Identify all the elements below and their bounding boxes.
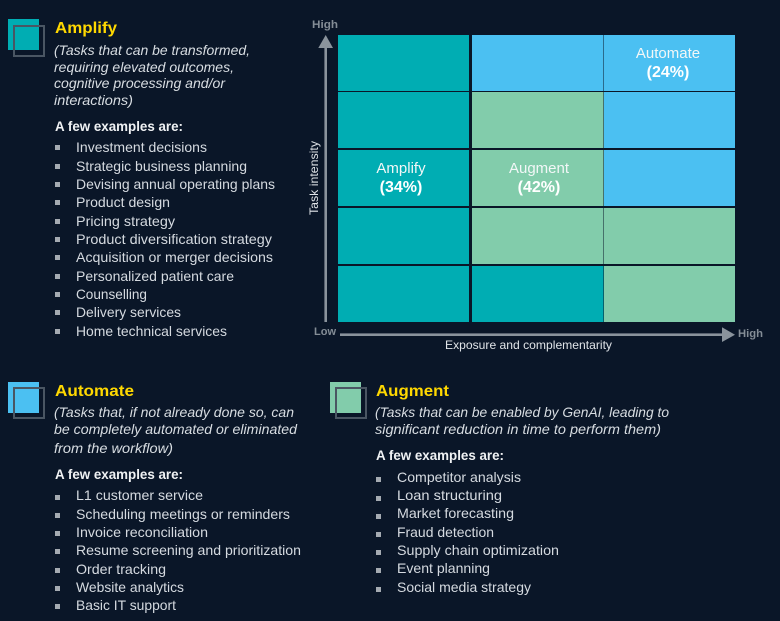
heading: Augment: Augment xyxy=(376,383,450,400)
label: Amplify 34%: Amplify xyxy=(376,160,426,177)
text: Automate definition: be completely automated or eliminated xyxy=(54,421,298,437)
icon: Automate square xyxy=(8,382,44,418)
list: Amplify examples: Devising annual operating plans xyxy=(76,176,275,192)
text: Amplify definition: interactions) xyxy=(54,92,133,108)
panel: Automate description xyxy=(8,382,301,613)
label: Automate 24%: (24%) xyxy=(647,64,689,81)
list: Amplify examples xyxy=(55,139,275,339)
text: Automate definition: (Tasks that, if not already done so, can xyxy=(54,404,294,420)
list: Automate examples: Order tracking xyxy=(76,561,166,577)
subheading: Automate examples: A few examples are: xyxy=(55,466,183,482)
list: Automate examples: Website analytics xyxy=(76,579,184,595)
text: Augment definition: (Tasks that can be enabled by GenAI, leading to xyxy=(375,404,669,420)
text: Automate definition: from the workflow) xyxy=(54,440,173,456)
icon: Augment square xyxy=(330,382,366,418)
list: Amplify examples: Investment decisions xyxy=(76,139,207,155)
list: Augment examples: Event planning xyxy=(397,560,490,576)
list: Automate examples: Scheduling meetings or reminders xyxy=(76,506,290,522)
text: Automate definition xyxy=(54,404,298,456)
subheading: Amplify examples: A few examples are: xyxy=(55,118,183,134)
list: Amplify examples: Product diversification strategy xyxy=(76,231,272,247)
axis label: high intensity: High xyxy=(312,19,338,31)
label: Amplify 34% xyxy=(376,160,426,196)
text: Amplify definition: cognitive processing and/or xyxy=(54,75,226,91)
list: Amplify examples: Home technical services xyxy=(76,323,227,339)
label: Automate 24%: Automate xyxy=(636,45,700,62)
icon: Amplify square xyxy=(8,19,44,56)
panel: Amplify description xyxy=(8,19,275,339)
panel: Augment description xyxy=(330,382,669,595)
text: Augment definition xyxy=(375,404,669,437)
heading: Automate: Automate xyxy=(55,383,134,400)
subheading: Augment examples: A few examples are: xyxy=(376,447,504,463)
list: Automate examples: Resume screening and prioritization xyxy=(76,542,301,558)
list: Augment examples: Fraud detection xyxy=(397,524,494,540)
list: Automate examples: L1 customer service xyxy=(76,487,203,503)
list: Augment examples: Social media strategy xyxy=(397,579,531,595)
list: Amplify examples: Personalized patient care xyxy=(76,268,234,284)
heading: Amplify: Amplify xyxy=(55,20,117,37)
list: Amplify examples: Strategic business planning xyxy=(76,158,247,174)
label: Augment 42%: (42%) xyxy=(518,179,560,196)
axis label: high exposure: High xyxy=(738,328,763,340)
text: Amplify definition: (Tasks that can be transformed, xyxy=(54,42,250,58)
list: Augment examples xyxy=(376,469,559,595)
list: Augment examples: Supply chain optimization xyxy=(397,542,559,558)
grid: matrix cells xyxy=(338,35,735,322)
text: Augment definition: significant reduction in time to perform them) xyxy=(375,421,661,437)
list: Amplify examples: Product design xyxy=(76,194,170,210)
axis label: low: Low xyxy=(314,326,336,338)
list: Automate examples: Invoice reconciliation xyxy=(76,524,208,540)
label: Augment 42% xyxy=(509,160,570,196)
arrow: vertical axis xyxy=(318,35,333,322)
label: Amplify 34%: (34%) xyxy=(380,179,422,196)
axis title: exposure and complementarity: Exposure and complementarity xyxy=(445,338,612,352)
text: Amplify definition: requiring elevated outcomes, xyxy=(54,59,234,75)
label: Automate 24% xyxy=(636,45,700,81)
label: Augment 42%: Augment xyxy=(509,160,570,177)
list: Automate examples: Basic IT support xyxy=(76,597,176,613)
list: Automate examples xyxy=(55,487,301,613)
list: Amplify examples: Pricing strategy xyxy=(76,213,175,229)
list: Amplify examples: Delivery services xyxy=(76,304,181,320)
list: Augment examples: Loan structuring xyxy=(397,487,502,503)
text: Amplify definition xyxy=(54,42,250,108)
arrow: horizontal axis xyxy=(340,327,735,342)
list: Augment examples: Market forecasting xyxy=(397,505,514,521)
chart: task intensity vs exposure matrix xyxy=(307,19,763,352)
list: Amplify examples: Acquisition or merger decisions xyxy=(76,249,273,265)
list: Amplify examples: Counselling xyxy=(76,286,147,302)
axis title: task intensity: Task intensity xyxy=(307,141,321,215)
list: Augment examples: Competitor analysis xyxy=(397,469,521,485)
